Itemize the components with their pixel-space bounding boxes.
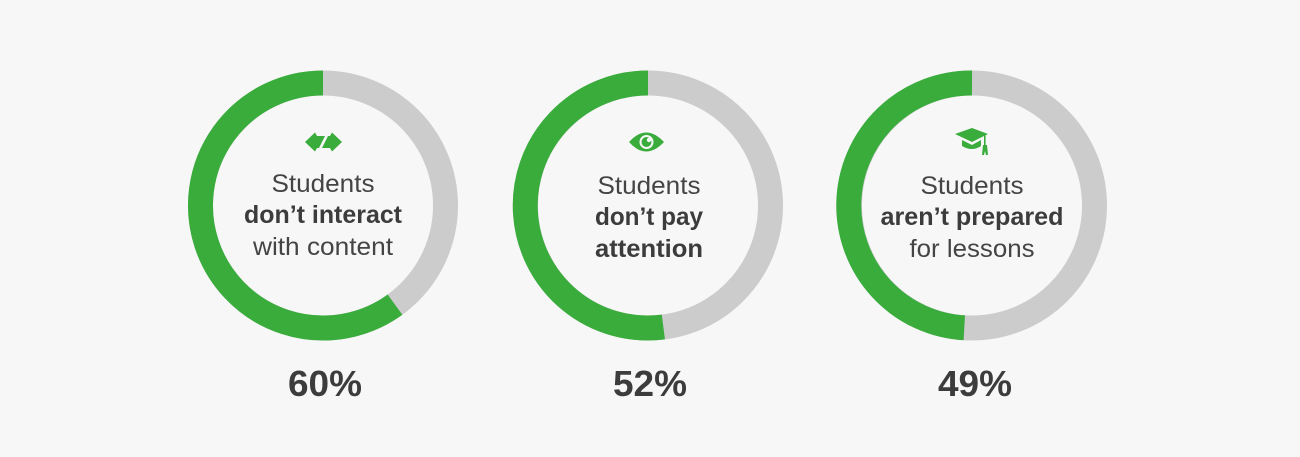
donut chart: 49% [849, 83, 1094, 328]
donut chart: 60% [200, 83, 446, 328]
label text [880, 172, 1064, 263]
panel: students don't pay attention, 52% [525, 83, 770, 404]
label text: Students [598, 172, 700, 200]
icon: graduation cap [955, 128, 988, 155]
label text: for lessons [910, 235, 1034, 263]
label text [595, 172, 703, 263]
donut chart: 52% [525, 83, 770, 328]
icon: two-way arrows [305, 132, 342, 152]
icon: eye [629, 132, 664, 152]
panel: students don't interact with content, 60% [200, 83, 446, 404]
label text: aren’t prepared [880, 203, 1064, 231]
percentage: 52% [613, 363, 687, 404]
percentage: 60% [288, 363, 362, 404]
panel: students aren't prepared for lessons, 49% [849, 83, 1094, 404]
label text [244, 170, 403, 261]
label text: don’t interact [244, 201, 403, 229]
label text: don’t pay [595, 203, 703, 231]
label text: with content [252, 233, 393, 261]
label text: attention [595, 235, 703, 263]
percentage: 49% [938, 363, 1012, 404]
label text: Students [920, 172, 1024, 200]
label text: Students [272, 170, 374, 198]
